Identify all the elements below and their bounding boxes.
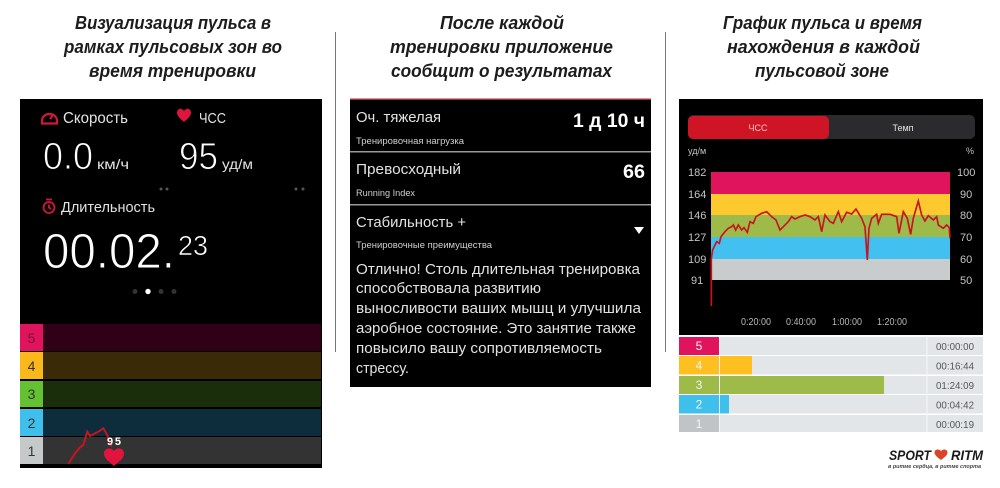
- axis labels: 182: [688, 167, 706, 179]
- time axis: 1:20:00: [877, 317, 907, 328]
- table: time in each zone: 2: [696, 398, 703, 412]
- current heart-rate marker: 95: [107, 436, 121, 448]
- title: middle column: сообщит о результатах: [391, 61, 613, 81]
- logo: Sport Ritm: SPORT: [889, 447, 932, 463]
- title: left column: Визуализация пульса в: [75, 13, 271, 33]
- heart rate metric: 95: [179, 136, 218, 178]
- pager dots: [132, 289, 176, 294]
- speed metric: [42, 110, 129, 178]
- axis labels: [688, 146, 975, 287]
- icon: speedometer: [42, 114, 57, 124]
- title: left column: время тренировки: [89, 61, 256, 81]
- zone bars: 3: [28, 386, 36, 402]
- axis labels: 109: [688, 254, 706, 266]
- heart rate metric: ЧСС: [199, 110, 226, 127]
- benefit description: способствовала развитию: [356, 280, 541, 297]
- row: training load: Тренировочная нагрузка: [356, 136, 464, 146]
- row: training load: [356, 109, 645, 146]
- title: right column: пульсовой зоне: [755, 61, 889, 81]
- duration metric: [43, 199, 208, 279]
- axis labels: 100: [957, 167, 975, 179]
- table: time in each zone: 00:04:42: [936, 400, 974, 412]
- title: right column: [723, 13, 922, 81]
- time axis: 0:20:00: [741, 317, 771, 328]
- tabs: [688, 115, 975, 139]
- axis labels: %: [966, 146, 974, 156]
- axis labels: 90: [960, 189, 972, 201]
- zone bars: [20, 324, 321, 464]
- row: training load: Оч. тяжелая: [356, 109, 441, 126]
- time axis: 1:00:00: [832, 317, 862, 328]
- logo: Sport Ritm: в ритме сердца, в ритме спорта: [888, 464, 981, 470]
- row: training benefit: Тренировочные преимущества: [356, 240, 492, 250]
- axis labels: 80: [960, 210, 972, 222]
- table: time in each zone: 00:16:44: [936, 360, 974, 372]
- current heart-rate marker: [104, 436, 124, 466]
- speed metric: Скорость: [63, 110, 128, 127]
- zone bars: 1: [28, 443, 36, 459]
- live heart-rate trace: [68, 428, 112, 464]
- title: right column: График пульса и время: [723, 13, 922, 33]
- table: time in each zone: 5: [696, 339, 703, 353]
- axis labels: 127: [688, 232, 706, 244]
- panel: post-workout results: [350, 98, 651, 387]
- logo: Sport Ritm: RITM: [951, 447, 983, 463]
- duration metric: 00.02.: [43, 225, 175, 279]
- title: left column: [63, 13, 282, 81]
- icon: stopwatch: [44, 200, 54, 213]
- row: running index: Превосходный: [356, 161, 461, 178]
- axis labels: 91: [691, 275, 703, 287]
- table: time in each zone: 3: [696, 378, 703, 392]
- axis labels: 164: [688, 189, 706, 201]
- time axis: [741, 317, 907, 328]
- benefit description: аэробное состояние. Это занятие также: [356, 320, 636, 337]
- axis labels: уд/м: [688, 146, 706, 156]
- table: time in each zone: 00:00:00: [936, 341, 974, 353]
- table: time in each zone: 00:00:19: [936, 419, 974, 431]
- icon: dropdown triangle: [634, 227, 644, 234]
- heart-rate line: [711, 201, 950, 306]
- row: running index: [356, 161, 645, 198]
- table: time in each zone: 4: [696, 358, 703, 372]
- table: time in each zone: [679, 337, 983, 432]
- table: time in each zone: 01:24:09: [936, 380, 974, 392]
- zone bars: 2: [28, 415, 36, 431]
- row: running index: 66: [623, 162, 645, 183]
- axis labels: 70: [960, 232, 972, 244]
- tabs: ЧСС: [748, 123, 768, 133]
- time axis: 0:40:00: [786, 317, 816, 328]
- logo: Sport Ritm: [888, 447, 983, 470]
- title: middle column: тренировки приложение: [390, 37, 613, 57]
- benefit description: повысило вашу сопротивляемость: [356, 340, 602, 357]
- axis labels: 50: [960, 275, 972, 287]
- title: middle column: После каждой: [440, 13, 564, 33]
- heart rate metric: уд/м: [222, 156, 253, 172]
- axis labels: 60: [960, 254, 972, 266]
- speed metric: 0.0: [43, 136, 93, 178]
- benefit description: Отлично! Столь длительная тренировка: [356, 261, 641, 278]
- speed metric: км/ч: [97, 156, 129, 172]
- chart zones: [711, 172, 950, 280]
- tabs: Темп: [892, 123, 914, 133]
- title: right column: нахождения в каждой: [727, 37, 920, 57]
- row: training benefit: Стабильность +: [356, 214, 466, 231]
- table: time in each zone: 1: [696, 417, 703, 431]
- zone bars: 5: [28, 330, 36, 346]
- heart rate metric: [177, 109, 253, 178]
- benefit description: [356, 261, 642, 377]
- title: left column: рамках пульсовых зон во: [63, 37, 282, 57]
- panel: heart-rate chart: [679, 99, 983, 335]
- duration metric: Длительность: [61, 199, 155, 216]
- benefit description: стрессу.: [356, 360, 409, 377]
- panel: live workout screen: [20, 99, 322, 468]
- axis labels: 146: [688, 210, 706, 222]
- title: middle column: [390, 13, 613, 81]
- row: training benefit: [356, 214, 644, 250]
- zone bars: 4: [28, 358, 36, 374]
- benefit description: выносливости ваших мышц и улучшила: [356, 300, 642, 317]
- row: running index: Running Index: [356, 188, 416, 198]
- row: training load: 1 д 10 ч: [573, 111, 645, 132]
- icon: heart: [177, 109, 191, 122]
- duration metric: 23: [178, 230, 208, 261]
